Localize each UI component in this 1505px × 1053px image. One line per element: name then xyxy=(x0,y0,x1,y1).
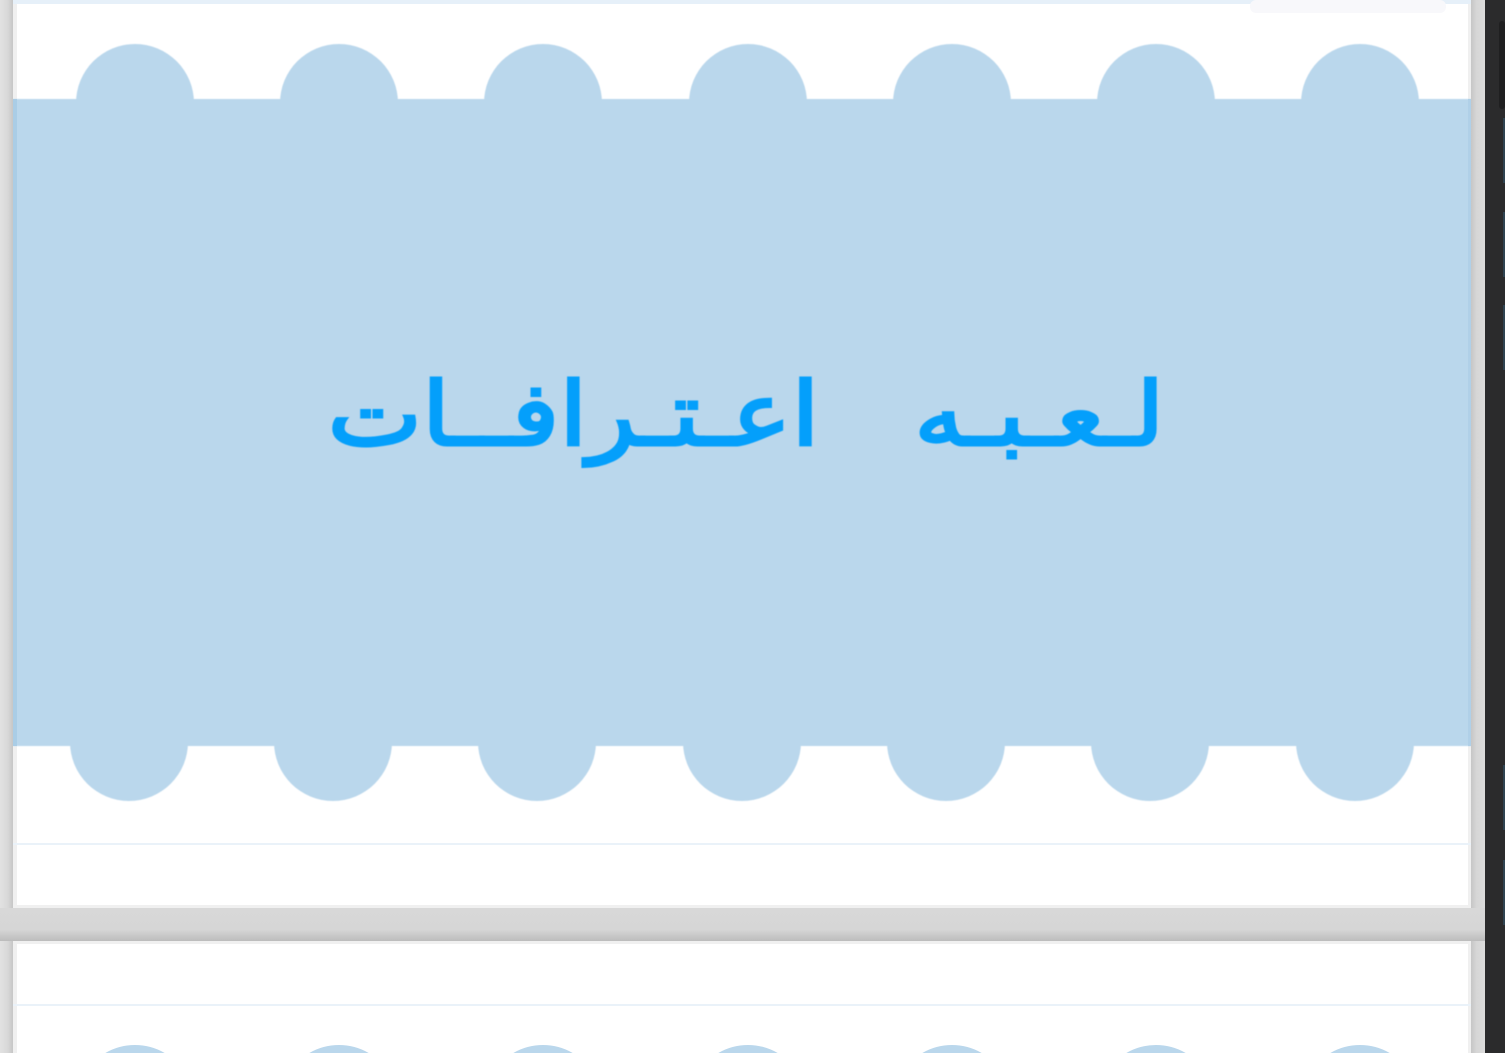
title: اعـتـرافــات xyxy=(327,363,819,466)
panel: second card xyxy=(13,941,1471,1053)
title: لـعـبـه xyxy=(914,363,1164,466)
title xyxy=(327,363,1164,469)
